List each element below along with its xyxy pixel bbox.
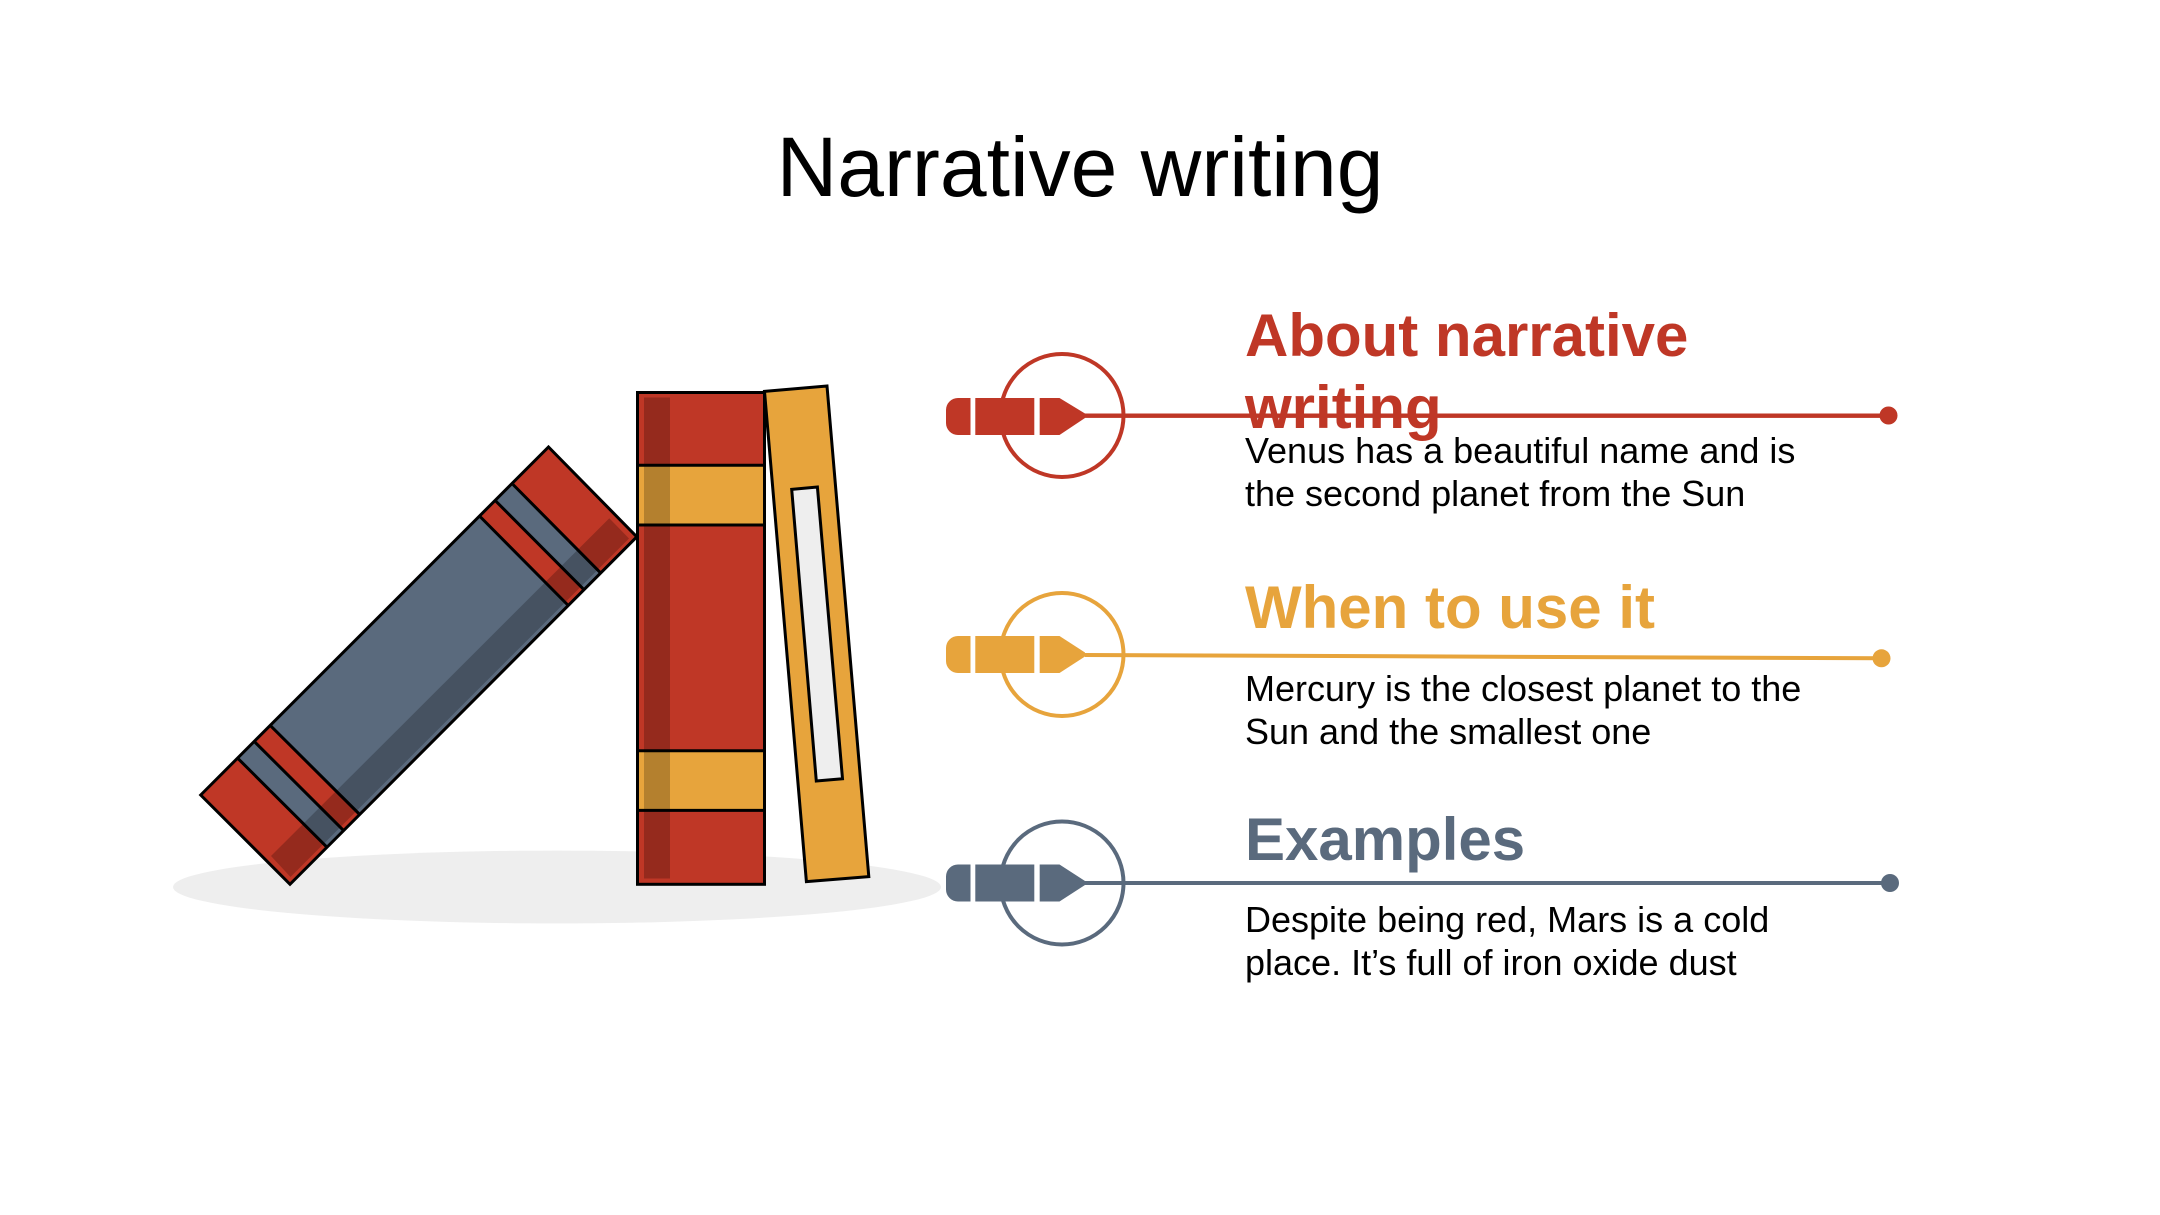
icon: pen and circle [946,354,1124,477]
description: the second planet from the Sun [1245,473,1745,514]
connector line with end dot [1085,649,1890,667]
description: Venus has a beautiful name and is [1245,430,1795,471]
description: Mercury is the closest planet to the [1245,668,1801,709]
description: place. It’s full of iron oxide dust [1245,942,1737,983]
description: Despite being red, Mars is a cold [1245,899,1769,940]
connector line with end dot [1085,874,1899,892]
spine label [792,487,842,781]
heading: About narrative [1245,302,1688,369]
book: thin yellow book [764,386,869,882]
heading: writing [1244,374,1442,441]
illustration: leaning books [173,386,941,923]
heading: When to use it [1245,574,1655,641]
ground shadow [173,851,941,923]
book: leaning slate book [201,447,637,884]
title: Narrative writing [777,120,1383,214]
item: examples [946,806,1899,983]
heading: Examples [1245,806,1525,873]
book: upright red book [638,392,764,884]
item: about narrative writing [946,302,1898,514]
item: when to use it [946,574,1890,752]
connector line with end dot [1085,406,1898,424]
icon: pen and circle [946,822,1124,944]
description: Sun and the smallest one [1245,711,1651,752]
icon: pen and circle [946,593,1124,716]
